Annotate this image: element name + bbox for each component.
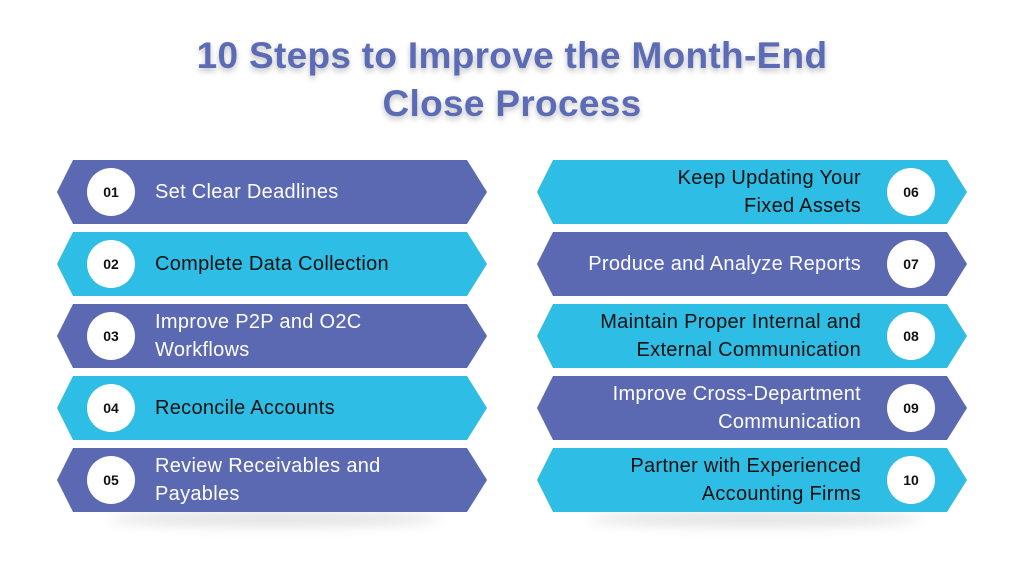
step 08: 08 [903,328,919,344]
step 03: Workflows [155,339,250,361]
step 06: 06 [903,184,919,200]
step 10: 10 [903,472,919,488]
step 06: Fixed Assets [744,195,861,217]
step 09 [537,376,967,440]
title: Close Process [383,83,641,124]
step 01: Set Clear Deadlines [155,181,339,203]
step 10: Accounting Firms [702,483,861,505]
step 07: 07 [903,256,919,272]
step 08 [537,304,967,368]
step 10: Partner with Experienced [630,455,861,477]
step 06: Keep Updating Your [678,167,861,189]
step 04 [57,376,487,440]
step 04: 04 [103,400,119,416]
step 05: Payables [155,483,240,505]
step 03 [57,304,487,368]
step 03: 03 [103,328,119,344]
step 04: Reconcile Accounts [155,397,335,419]
step 01: 01 [103,184,119,200]
step 05: Review Receivables and [155,455,381,477]
step 02: Complete Data Collection [155,253,389,275]
step 09: 09 [903,400,919,416]
step 07: Produce and Analyze Reports [588,253,861,275]
step 08: Maintain Proper Internal and [600,311,861,333]
step 07 [537,232,967,296]
step 09: Improve Cross-Department [613,383,861,405]
step 02 [57,232,487,296]
step 05 [57,448,487,512]
title [197,35,828,124]
step 06 [537,160,967,224]
step 08: External Communication [637,339,861,361]
step 10 [537,448,967,512]
step 02: 02 [103,256,119,272]
step 01 [57,160,487,224]
title: 10 Steps to Improve the Month-End [197,35,827,76]
step 09: Communication [718,411,861,433]
step 05: 05 [103,472,119,488]
step 03: Improve P2P and O2C [155,311,362,333]
